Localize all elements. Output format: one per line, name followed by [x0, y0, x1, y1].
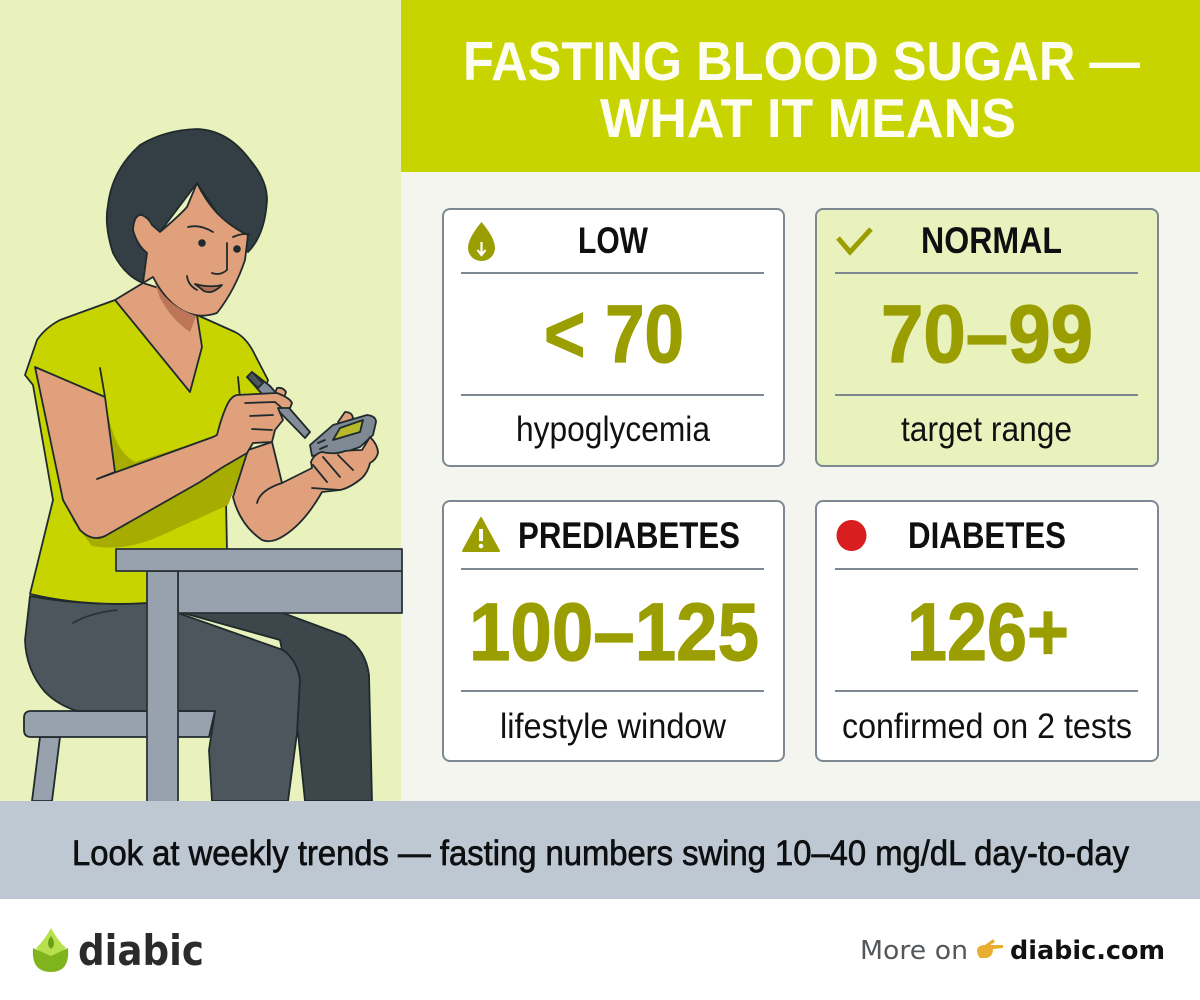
finger lines	[257, 455, 353, 503]
panel: illustration background	[0, 0, 401, 802]
right arm and hand	[233, 437, 378, 541]
face	[133, 183, 248, 316]
label: low: LOW	[578, 220, 648, 261]
illustration: woman testing blood sugar at a table	[24, 129, 402, 802]
label: prediabetes: PREDIABETES	[518, 515, 740, 556]
value: low: < 70	[544, 289, 684, 380]
neck and chest	[115, 283, 202, 392]
hand lines	[245, 402, 282, 430]
front leg and hip	[25, 596, 300, 801]
label: diabetes: DIABETES	[908, 515, 1066, 556]
icon: logo drop	[33, 928, 68, 972]
sleeve fold	[100, 368, 240, 398]
card: normal	[816, 209, 1158, 466]
callout strip	[0, 801, 1200, 899]
shirt	[25, 300, 268, 604]
pants crease	[73, 610, 117, 623]
facial features	[187, 226, 249, 292]
value: normal: 70–99	[881, 289, 1093, 380]
icon: check mark	[838, 229, 871, 252]
icon: red dot	[836, 520, 866, 551]
card: prediabetes	[443, 501, 784, 761]
value: diabetes: 126+	[907, 587, 1069, 678]
caption: low: hypoglycemia	[516, 410, 710, 449]
icon: water drop	[468, 222, 495, 261]
neck shadow	[154, 280, 196, 332]
card: diabetes	[816, 501, 1158, 761]
heading: title	[463, 30, 1140, 149]
hair	[107, 129, 267, 283]
caption: normal: target range	[901, 410, 1072, 449]
more on link: More on	[860, 936, 968, 966]
logo	[33, 926, 204, 975]
icon: warning triangle	[463, 518, 499, 551]
caption: diabetes: confirmed on 2 tests	[842, 707, 1132, 746]
left arm and hand	[35, 367, 292, 538]
back leg	[183, 613, 372, 801]
logo wordmark: diabic	[78, 926, 204, 975]
panel: title banner	[401, 0, 1200, 172]
value: prediabetes: 100–125	[469, 587, 759, 678]
more on link	[860, 936, 1165, 966]
footer	[0, 899, 1200, 1000]
table	[116, 549, 402, 802]
label: normal: NORMAL	[921, 220, 1062, 261]
thumb behind meter	[338, 412, 353, 428]
glucose meter	[310, 415, 376, 456]
lancet device	[247, 372, 310, 438]
heading: title: WHAT IT MEANS	[600, 87, 1016, 149]
background: right panel	[401, 172, 1200, 802]
callout text: Look at weekly trends — fasting numbers swing 10–40 mg/dL day-to-day	[72, 834, 1129, 873]
heading: title: FASTING BLOOD SUGAR —	[463, 30, 1140, 92]
stool	[24, 711, 215, 801]
shirt shadow	[72, 400, 248, 548]
more on link: diabic.com	[1010, 936, 1165, 966]
icon: pointing hand	[977, 939, 1003, 958]
caption: prediabetes: lifestyle window	[500, 707, 727, 746]
card: low	[443, 209, 784, 466]
